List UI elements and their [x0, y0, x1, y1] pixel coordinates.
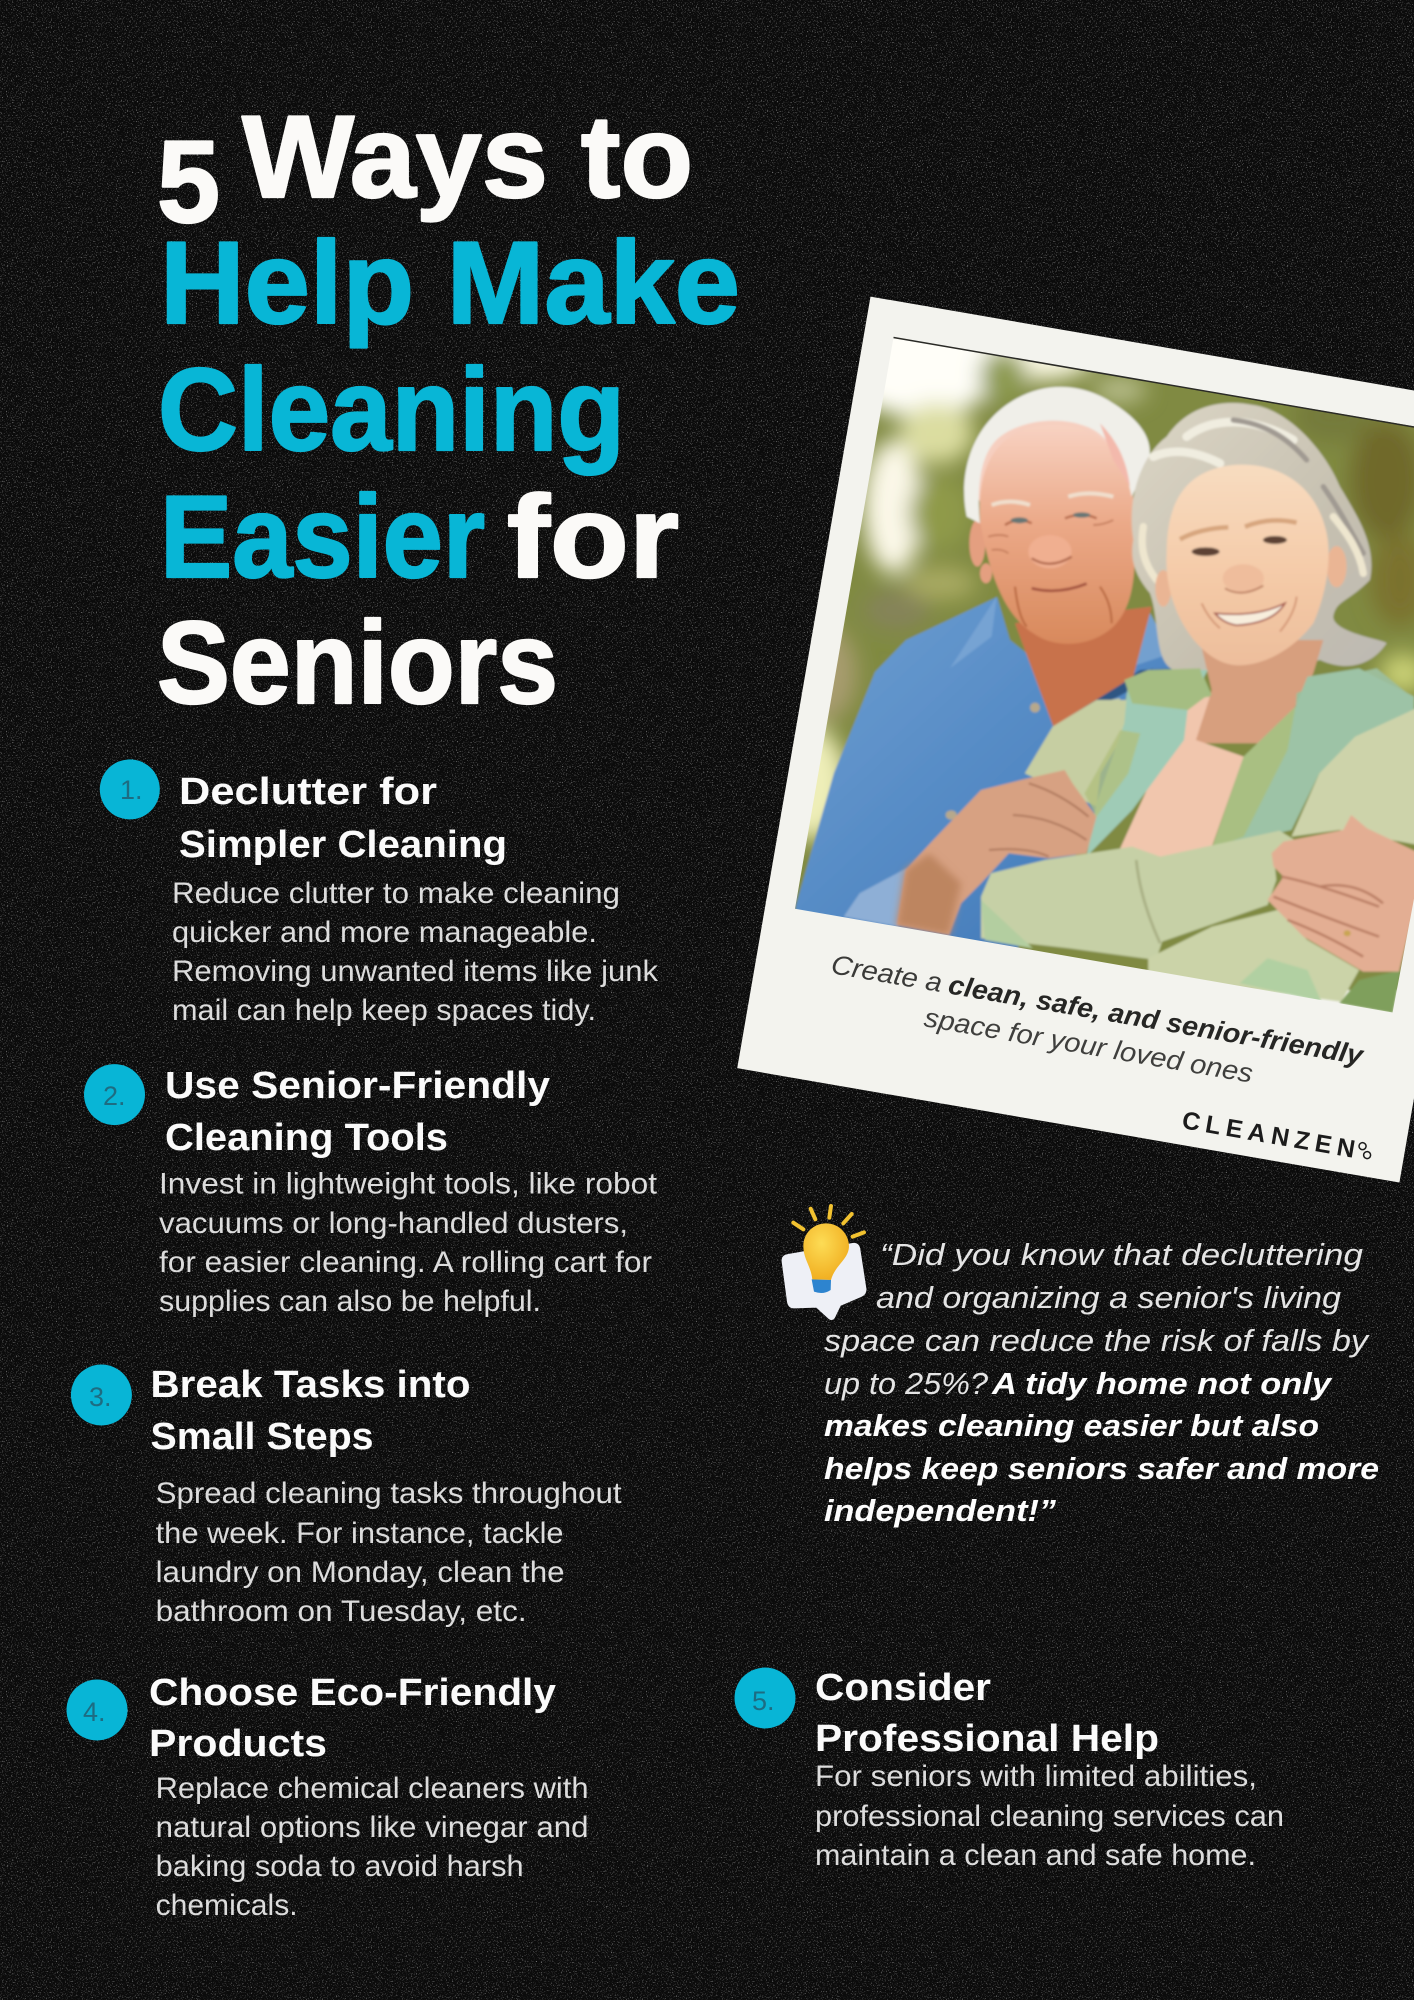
quote intro text: up to 25%? — [824, 1366, 989, 1401]
body 4: natural options like vinegar and — [156, 1811, 589, 1844]
title: Help Make — [160, 217, 740, 348]
quote intro text: and organizing a senior's living — [876, 1280, 1341, 1315]
photo top edge line — [894, 338, 1414, 427]
woman's clothing lower — [1025, 668, 1414, 860]
body 1: Removing unwanted items like junk — [172, 955, 659, 988]
body 1 — [172, 877, 659, 1027]
caption line 2: space for your loved ones — [922, 1002, 1255, 1089]
heading 3: Small Steps — [150, 1416, 374, 1458]
heading 2 — [165, 1065, 550, 1159]
title: 5 — [157, 116, 220, 247]
body 3 — [156, 1477, 622, 1628]
heading 4: Products — [149, 1723, 327, 1765]
body 1: mail can help keep spaces tidy. — [172, 994, 596, 1027]
body 3: the week. For instance, tackle — [156, 1517, 564, 1550]
body 5 — [815, 1760, 1284, 1872]
caption line 1 — [829, 949, 1367, 1071]
body 2: for easier cleaning. A rolling cart for — [159, 1246, 652, 1279]
quote intro text: space can reduce the risk of falls by — [824, 1323, 1371, 1358]
tip 4: eco-friendly — [66, 1672, 589, 1922]
body 2: vacuums or long-handled dusters, — [159, 1207, 628, 1240]
body 2: supplies can also be helpful. — [159, 1285, 541, 1318]
man's shirt — [790, 597, 1180, 960]
number badge 4: 4. — [83, 1697, 106, 1727]
quote intro text: “Did you know that decluttering — [880, 1237, 1363, 1272]
heading 1: Simpler Cleaning — [179, 824, 507, 866]
tip 1: declutter — [100, 759, 659, 1027]
number badge 3 — [71, 1364, 132, 1426]
man's head — [964, 387, 1152, 727]
number badge 3: 3. — [89, 1382, 112, 1412]
hands and forearm — [897, 770, 1414, 1013]
icon: light bulb on speech bubble — [783, 1206, 865, 1319]
title: for — [507, 471, 679, 602]
number badge 1: 1. — [120, 775, 143, 805]
quote bold emphasis: independent!” — [824, 1493, 1057, 1528]
photo: senior couple — [767, 303, 1414, 1013]
number badge 4 — [66, 1680, 128, 1740]
body 5: For seniors with limited abilities, — [815, 1760, 1257, 1793]
tip 5: professional help — [734, 1667, 1284, 1872]
tip 2: tools — [84, 1064, 658, 1318]
body 3: Spread cleaning tasks throughout — [156, 1477, 622, 1510]
number badge 5: 5. — [752, 1686, 775, 1716]
number badge 2 — [84, 1064, 145, 1125]
title: Seniors — [157, 597, 558, 728]
number badge 2: 2. — [103, 1081, 126, 1111]
heading 4: Choose Eco-Friendly — [149, 1672, 556, 1714]
quote bold emphasis: A tidy home not only — [991, 1366, 1333, 1401]
quote intro text — [824, 1237, 1371, 1401]
heading 5: Consider — [815, 1667, 991, 1709]
quote bold emphasis: helps keep seniors safer and more — [824, 1451, 1379, 1486]
heading 1: Declutter for — [179, 771, 437, 813]
body 4: baking soda to avoid harsh — [156, 1850, 524, 1883]
title: Easier — [160, 471, 485, 602]
caption line 1: clean, safe, and senior-friendly — [946, 970, 1367, 1071]
body 2: Invest in lightweight tools, like robot — [159, 1168, 658, 1200]
body 5: maintain a clean and safe home. — [815, 1839, 1256, 1872]
heading 3: Break Tasks into — [150, 1364, 470, 1406]
number badge 5 — [734, 1668, 796, 1728]
body 2 — [159, 1168, 658, 1318]
heading 3 — [150, 1364, 470, 1458]
heading 4 — [149, 1672, 556, 1765]
heading 2: Cleaning Tools — [165, 1117, 448, 1159]
body 4: chemicals. — [156, 1889, 298, 1922]
title: Cleaning — [158, 344, 625, 475]
title — [157, 91, 740, 728]
body 3: laundry on Monday, clean the — [156, 1556, 565, 1589]
heading 5: Professional Help — [815, 1718, 1159, 1760]
quote callout — [824, 1237, 1379, 1528]
body 4: Replace chemical cleaners with — [156, 1772, 589, 1805]
body 3: bathroom on Tuesday, etc. — [156, 1595, 527, 1628]
quote bold emphasis: makes cleaning easier but also — [824, 1408, 1319, 1443]
tip 3: small steps — [71, 1364, 622, 1628]
heading 2: Use Senior-Friendly — [165, 1065, 550, 1107]
heading 1 — [179, 771, 507, 866]
woman's head — [1132, 403, 1387, 743]
logo: Cleanzen: CLEANZEN — [1180, 1106, 1357, 1164]
title: Ways to — [242, 91, 693, 222]
body 5: professional cleaning services can — [815, 1800, 1284, 1833]
photo background: sunlit foliage — [767, 303, 1414, 990]
woman's jacket upper — [1112, 667, 1406, 704]
body 1: quicker and more manageable. — [172, 916, 597, 949]
polaroid frame — [737, 297, 1414, 1183]
body 4 — [156, 1772, 589, 1922]
quote bold emphasis — [824, 1366, 1379, 1528]
heading 5 — [815, 1667, 1159, 1760]
body 1: Reduce clutter to make cleaning — [172, 877, 620, 910]
number badge 1 — [100, 759, 160, 819]
polaroid card — [737, 297, 1414, 1183]
caption line 1: Create a — [829, 949, 944, 998]
